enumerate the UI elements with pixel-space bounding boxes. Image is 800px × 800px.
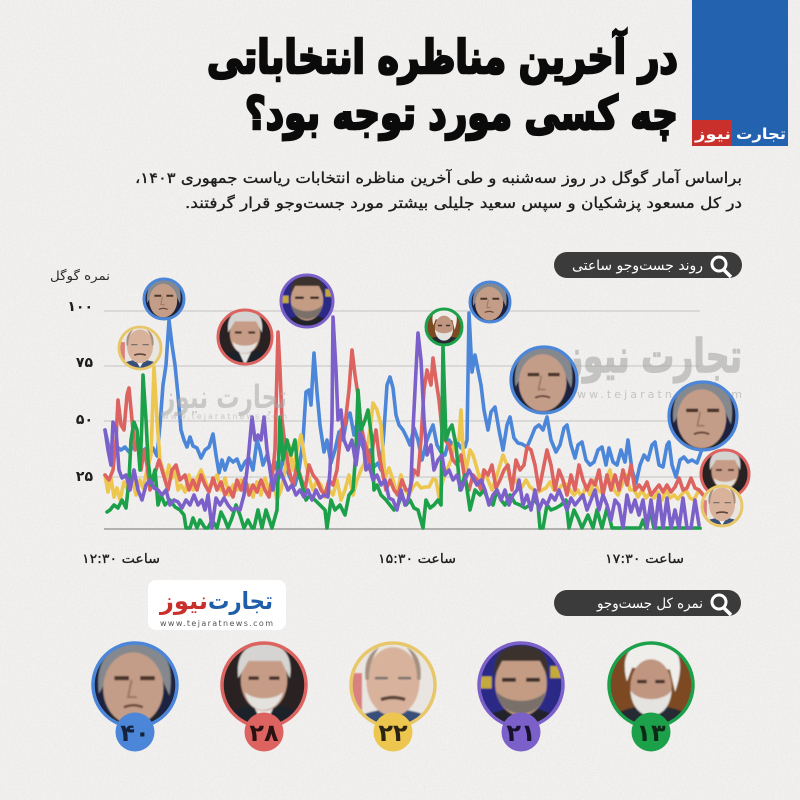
title: چه کسی مورد توجه بود؟ [245,86,678,141]
avatar: Pezeshkian large right [668,381,738,451]
chart watermark right [563,329,742,401]
time label 15:30: ساعت ۱۵:۳۰ [378,552,456,567]
total score: Jalili 28 [221,642,307,752]
total score: Pourmohammadi 13 [608,642,694,752]
section pill: total search score [554,590,741,616]
avatar: Pourmohammadi on chart [425,308,463,346]
y axis labels [67,299,93,485]
brand logo card: www.tejaratnews.com [160,619,273,628]
avatar: Ghalibaf on chart [119,327,161,369]
series: Zakani [105,317,699,528]
section pill: total search score: نمره کل جست‌وجو [596,596,703,612]
y axis labels: ۷۵ [76,355,93,371]
chart watermark left [161,378,287,421]
brand logo card: نیوز [159,587,208,615]
section pill: hourly search trend [554,252,742,278]
series: Jalili [105,332,703,497]
title: در آخرین مناظره انتخاباتی [207,29,678,84]
series: Ghalibaf [105,367,704,500]
avatar: Ghalibaf line end [701,485,743,527]
brand tab logo [692,0,788,146]
avatar: Jalili on chart [217,309,273,365]
brand logo card: تجارت [208,587,273,615]
total score: Ghalibaf 22 [350,642,436,752]
avatar: Zakani on chart [280,274,334,328]
total score: Zakani 21 [478,642,564,752]
y axis title: نمره گوگل [50,268,110,284]
intro text [135,169,742,213]
chart watermark left: تجارت نیوز [161,378,287,416]
y axis labels: ۲۵ [76,469,93,485]
chart watermark left: www.tejaratnews.com [162,412,287,421]
title [207,29,678,141]
brand logo card [148,580,286,630]
time label 12:30: ساعت ۱۲:۳۰ [82,552,160,567]
avatar: Jalili line end [700,449,750,499]
time label 17:30: ساعت ۱۷:۳۰ [605,552,684,567]
section pill: hourly search trend: روند جست‌وجو ساعتی [572,258,703,274]
y axis labels: ۱۰۰ [67,299,93,315]
line chart: hourly search scores [105,313,704,528]
series: Pezeshkian [105,313,701,485]
total score: Zakani 21: ۲۱ [506,719,536,747]
intro text: براساس آمار گوگل در روز سه‌شنبه و طی آخرین مناظره انتخابات ریاست جمهوری ۱۴۰۳، [135,169,742,187]
chart watermark right: www.tejaratnews.com [565,388,742,401]
total score: Pezeshkian 40: ۴۰ [120,719,150,747]
total score: Jalili 28: ۲۸ [249,719,279,747]
total score: Pourmohammadi 13: ۱۳ [636,719,666,747]
avatar: Pezeshkian large centre [510,346,578,414]
total score: Pezeshkian 40 [92,642,178,752]
series: Pourmohammadi [107,347,700,528]
avatar: Pezeshkian second peak [470,282,510,322]
brand tab logo: نیوز [694,125,731,143]
total score: Ghalibaf 22: ۲۲ [378,719,408,747]
avatar: Pezeshkian on chart [144,279,184,319]
y axis labels: ۵۰ [76,412,93,428]
intro text: در کل مسعود پزشکیان و سپس سعید جلیلی بیشتر مورد جست‌وجو قرار گرفتند. [185,194,742,213]
brand tab logo: تجارت [736,125,786,143]
